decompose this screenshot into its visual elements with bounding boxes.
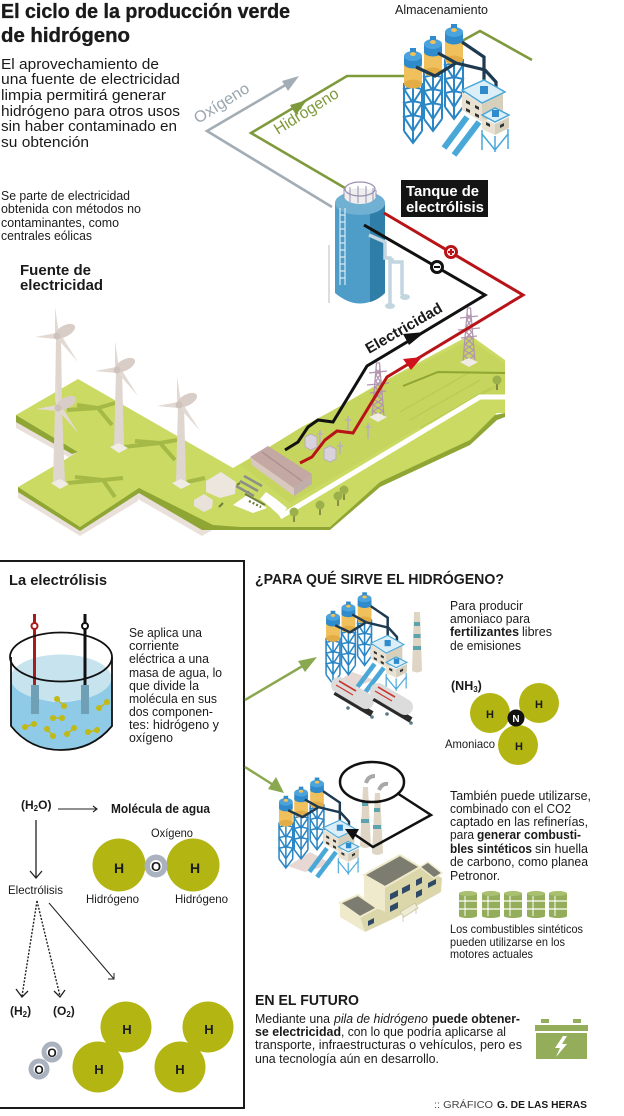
illustration: chimney: [412, 612, 422, 672]
icon: pylons: [367, 308, 480, 422]
text: source of electricity: obtenida con métodos no: [1, 202, 141, 216]
label: H2 formula: 2: [23, 1010, 28, 1019]
diagram: ammonia molecule: H: [535, 699, 543, 711]
label: Hidrógeno: Hidrógeno: [271, 85, 342, 138]
illustration: substation hall: [236, 416, 371, 507]
label: Oxígeno: Oxígeno: [151, 826, 193, 840]
label: H2 formula: ): [27, 1004, 31, 1018]
title: de hidrógeno: [1, 25, 130, 47]
text: electrolysis description: molécula en sus: [129, 691, 217, 706]
diagram: hydrogen molecules: H: [94, 1062, 104, 1077]
intro paragraph: [1, 56, 180, 151]
label: Tanque de electrólisis: Tanque de: [406, 183, 479, 200]
text: synthetic fuels: Petronor.: [450, 868, 500, 883]
diagram: hydrogen molecules: H: [175, 1062, 185, 1077]
diagram: water molecule: O: [151, 859, 161, 874]
intro paragraph: su obtención: [1, 134, 89, 151]
text: fertilizers: fertilizantes: [450, 624, 519, 639]
text: electrolysis description: eléctrica a una: [129, 651, 210, 666]
text: electrolysis description: que divide la: [129, 678, 200, 693]
text: electrolysis description: dos componen-: [129, 704, 213, 719]
text: future paragraph: [255, 1011, 522, 1066]
label: Electrólisis: Electrólisis: [8, 883, 63, 897]
text: future paragraph: Mediante una: [255, 1011, 331, 1026]
label: H2O formula: (H: [21, 798, 34, 812]
label: Tanque de electrólisis: electrólisis: [406, 199, 484, 216]
label: H2O formula: O): [38, 798, 51, 812]
intro paragraph: hidrógeno para otros usos: [1, 103, 180, 120]
text: future paragraph: transporte, infraestructuras o vehículos, pero es: [255, 1037, 522, 1052]
illustration: fuel plant ground: [288, 852, 332, 872]
arrow: positive cable: [300, 213, 523, 463]
text: synthetic fuels: [450, 788, 591, 883]
diagram: water molecule: [92, 838, 220, 892]
diagram: hydrogen molecules: H: [122, 1022, 132, 1037]
text: synthetic fuels: También puede utilizarse,: [450, 788, 591, 803]
label: O2 formula: ): [71, 1004, 75, 1018]
text: electrolysis description: oxígeno: [129, 730, 173, 745]
text: future paragraph: se electricidad: [255, 1024, 341, 1039]
arrow: dotted to H2: [16, 901, 37, 997]
text: electrolysis description: corriente: [129, 638, 179, 653]
text: engines note: [450, 922, 583, 961]
text: fertilizers: amoniaco para: [450, 611, 531, 626]
illustration: ammonia plant: [326, 592, 407, 693]
illustration: chimneys with smoke: [360, 776, 388, 855]
text: electrolysis description: Se aplica una: [129, 625, 203, 640]
arrow: CO2 capture loop: [340, 762, 431, 847]
illustration: ammonia plant ground: [340, 672, 375, 690]
text: synthetic fuels: generar combusti-: [477, 827, 581, 842]
text: source of electricity: centrales eólicas: [1, 229, 92, 243]
text: fertilizers: libres: [522, 624, 552, 639]
illustration: storage plant: [404, 24, 509, 155]
icon: small white buildings: [194, 472, 265, 512]
label: Hidrógeno right: Hidrógeno: [175, 892, 228, 906]
diagram: hydrogen molecules: [72, 1002, 234, 1092]
arrow: negative cable: [285, 225, 485, 450]
label: NH3 formula: 3: [473, 685, 478, 694]
text: source of electricity: Se parte de electricidad: [1, 189, 130, 203]
text: future paragraph: , con lo que podría aplicarse al: [341, 1024, 506, 1039]
icon: battery: [535, 1019, 588, 1059]
label: Molécula de agua: Molécula de agua: [111, 802, 211, 816]
text: fertilizers: [450, 598, 552, 653]
text: electrolysis description: masa de agua, lo: [129, 665, 222, 680]
text: synthetic fuels: de carbono, como planea: [450, 854, 589, 869]
label: Oxígeno: Oxígeno: [191, 80, 253, 127]
title: El ciclo de la producción verde: [1, 1, 290, 23]
diagram: ammonia molecule: H: [486, 709, 494, 721]
label: NH3 formula: (NH: [451, 679, 473, 693]
text: source of electricity: [1, 189, 141, 243]
credit: G. DE LAS HERAS: [497, 1100, 587, 1111]
text: source of electricity: contaminantes, como: [1, 216, 119, 230]
diagram: water molecule: H: [114, 860, 124, 876]
heading: La electrólisis: La electrólisis: [9, 572, 107, 589]
label: NH3 formula: ): [478, 679, 482, 693]
label: Tanque de electrólisis: [401, 180, 488, 217]
diagram: ammonia molecule: N: [512, 714, 520, 725]
label: O2 formula: (O: [53, 1004, 66, 1018]
diagram: ammonia molecule: [470, 683, 559, 765]
panel: la electrólisis: [0, 561, 244, 1108]
label: Amoniaco: Amoniaco: [445, 737, 495, 751]
diagram: oxygen molecule: [28, 1042, 62, 1080]
credit: :: GRÁFICO: [434, 1098, 493, 1111]
text: electrolysis description: tes: hidrógeno y: [129, 717, 219, 732]
label: Fuente de electricidad: Fuente de: [20, 262, 91, 279]
illustration: fuel plant: [279, 778, 359, 877]
intro paragraph: El aprovechamiento de: [1, 56, 159, 73]
arrow: oxygen line: [207, 76, 332, 207]
text: synthetic fuels: captado en las refinerías,: [450, 814, 588, 829]
text: engines note: motores actuales: [450, 947, 533, 961]
illustration: tanker trucks: [335, 681, 413, 725]
label: Almacenamiento: Almacenamiento: [395, 3, 488, 17]
text: electrolysis description: [129, 625, 222, 745]
title: [1, 1, 290, 47]
illustration: beaker with electrodes: [10, 614, 112, 750]
diagram: ammonia molecule: H: [515, 741, 523, 753]
text: synthetic fuels: combinado con el CO2: [450, 801, 571, 816]
intro paragraph: sin haber contaminado en: [1, 118, 177, 135]
arrow: dotted to O2: [37, 901, 65, 997]
arrow: to molecules: [49, 903, 114, 979]
intro paragraph: una fuente de electricidad: [1, 71, 180, 88]
arrow: to fuel plant: [245, 767, 284, 793]
label: H2O formula: 2: [34, 804, 39, 813]
text: synthetic fuels: bles sintéticos: [450, 841, 532, 856]
heading: en el futuro: EN EL FUTURO: [255, 992, 359, 1009]
arrow: to water molecule: [58, 806, 97, 812]
diagram: hydrogen molecules: H: [204, 1022, 214, 1037]
text: fertilizers: de emisiones: [450, 638, 521, 653]
text: engines note: Los combustibles sintéticos: [450, 922, 583, 936]
text: engines note: pueden utilizarse en los: [450, 935, 565, 949]
illustration: refinery building: [340, 855, 442, 932]
diagram: oxygen molecule: O: [47, 1046, 57, 1060]
icon: wind turbine, right: [157, 376, 205, 489]
label: H2 formula: (H: [10, 1004, 23, 1018]
diagram: water molecule: H: [190, 860, 200, 876]
icon: fuel barrels: [459, 891, 567, 918]
text: synthetic fuels: sin huella: [535, 841, 589, 856]
icon: wind turbine, back left: [35, 307, 78, 402]
arrow: to electrolysis: [30, 820, 42, 878]
label: Fuente de electricidad: electricidad: [20, 277, 103, 294]
diagram: oxygen molecule: O: [34, 1063, 44, 1077]
icon: trees: [290, 376, 502, 522]
label: Fuente de electricidad: [20, 262, 103, 294]
label: O2 formula: 2: [66, 1010, 71, 1019]
text: future paragraph: puede obtener-: [432, 1011, 520, 1026]
text: future paragraph: una tecnología aún en desarrollo.: [255, 1051, 439, 1066]
illustration: electrolysis tank: [329, 182, 410, 309]
label: Hidrógeno left: Hidrógeno: [86, 892, 139, 906]
credit: [434, 1098, 587, 1111]
intro paragraph: limpia permitirá generar: [1, 87, 166, 104]
illustration: wind farm and substation land: [16, 335, 505, 536]
label: Electricidad: Electricidad: [362, 300, 445, 357]
icon: wind turbine, front left: [36, 379, 123, 497]
text: future paragraph: pila de hidrógeno: [333, 1011, 428, 1026]
heading: para qué sirve: ¿PARA QUÉ SIRVE EL HIDRÓGENO?: [255, 570, 504, 588]
text: fertilizers: Para producir: [450, 598, 524, 613]
arrow: to ammonia plant: [245, 657, 317, 700]
text: synthetic fuels: para: [450, 827, 475, 842]
arrow: hydrogen line: [251, 31, 532, 188]
icon: wind turbine, centre: [67, 341, 177, 460]
